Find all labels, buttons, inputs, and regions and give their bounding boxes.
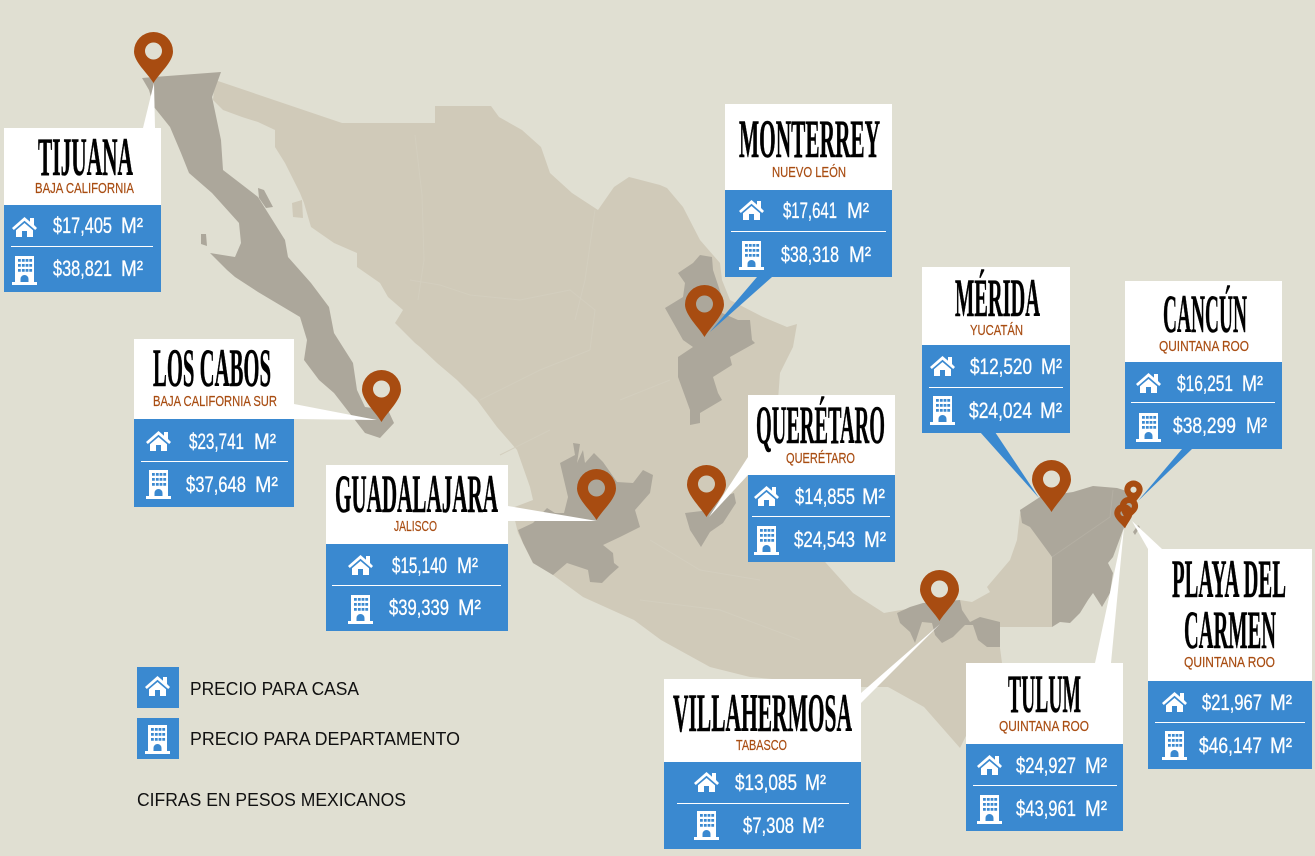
apartment price: $38,318 bbox=[781, 242, 839, 267]
map: Jalisco bbox=[518, 443, 653, 583]
apartment unit: M² bbox=[121, 256, 143, 281]
apartment price: $43,961 bbox=[1016, 796, 1076, 821]
note: currency: CIFRAS EN PESOS MEXICANOS bbox=[137, 790, 406, 810]
panel: Cancún bbox=[1125, 281, 1282, 501]
map: Gulf of California islands bbox=[201, 188, 273, 246]
map: Querétaro bbox=[685, 493, 736, 547]
icon: house bbox=[1136, 373, 1161, 393]
map: Sonora island bbox=[292, 200, 303, 218]
pointer bbox=[861, 624, 940, 703]
legend: building swatch bbox=[137, 718, 179, 759]
pin: Cancún bbox=[1124, 480, 1143, 505]
header bbox=[1125, 281, 1282, 362]
icon: house bbox=[146, 431, 171, 451]
map: Tabasco bbox=[897, 600, 1000, 647]
header bbox=[966, 663, 1123, 744]
pointer bbox=[980, 432, 1039, 498]
apartment price: $39,339 bbox=[389, 595, 449, 620]
legend: house swatch bbox=[137, 667, 179, 708]
text: QUERÉTARO bbox=[756, 395, 885, 455]
apartment unit: M² bbox=[1085, 796, 1107, 821]
apartment price: $38,821 bbox=[53, 256, 112, 281]
apartment unit: M² bbox=[864, 527, 886, 552]
pin: Tulum bbox=[1113, 503, 1134, 529]
pin: Tijuana bbox=[134, 32, 173, 83]
state name: BAJA CALIFORNIA SUR bbox=[153, 393, 277, 410]
header bbox=[134, 339, 294, 419]
apartment unit: M² bbox=[1270, 733, 1292, 758]
icon: building bbox=[694, 811, 719, 840]
legend: house label: PRECIO PARA CASA bbox=[190, 679, 359, 699]
prices block bbox=[1148, 681, 1312, 769]
house unit: M² bbox=[847, 198, 869, 223]
header bbox=[922, 267, 1070, 345]
header bbox=[725, 104, 892, 190]
prices block bbox=[134, 419, 294, 507]
prices block bbox=[4, 205, 161, 292]
panel: Guadalajara: GUADALAJARA bbox=[335, 464, 498, 524]
panel: Tulum: TULUM bbox=[1008, 664, 1081, 724]
panel: Mérida: MÉRIDA bbox=[955, 268, 1040, 328]
icon: house bbox=[739, 200, 764, 220]
apartment unit: M² bbox=[1246, 413, 1267, 438]
apartment price: $38,299 bbox=[1173, 413, 1236, 438]
icon: house bbox=[754, 486, 779, 506]
panel: Mérida bbox=[922, 267, 1070, 498]
panel: Querétaro bbox=[709, 395, 895, 562]
state name: NUEVO LEÓN bbox=[772, 164, 846, 181]
house unit: M² bbox=[1242, 371, 1263, 396]
apartment price: $37,648 bbox=[186, 472, 246, 497]
house price: $21,967 bbox=[1202, 690, 1262, 715]
header bbox=[1148, 549, 1312, 681]
state name: QUINTANA ROO bbox=[1159, 338, 1249, 355]
text: MONTERREY bbox=[739, 109, 880, 169]
house price: $17,641 bbox=[783, 198, 837, 223]
house price: $23,741 bbox=[189, 429, 244, 454]
header bbox=[326, 465, 508, 544]
apartment unit: M² bbox=[255, 472, 278, 497]
icon: house bbox=[12, 217, 37, 237]
apartment unit: M² bbox=[802, 813, 824, 838]
apartment price: $7,308 bbox=[743, 813, 794, 838]
prices block bbox=[326, 544, 508, 631]
pin: Los Cabos bbox=[362, 370, 401, 422]
panel: Guadalajara bbox=[326, 464, 597, 631]
map: mainland states bbox=[213, 80, 1052, 748]
panel: Los Cabos: LOS CABOS bbox=[153, 338, 271, 398]
prices block bbox=[748, 475, 895, 562]
pin: Querétaro bbox=[687, 465, 726, 517]
apartment price: $46,147 bbox=[1199, 733, 1262, 758]
pin: Villahermosa bbox=[920, 570, 959, 621]
icon: house bbox=[348, 555, 373, 575]
pointer bbox=[1138, 449, 1192, 501]
pointer bbox=[709, 457, 748, 517]
house price: $17,405 bbox=[53, 213, 112, 238]
legend: building label: PRECIO PARA DEPARTAMENTO bbox=[190, 729, 460, 749]
pointer bbox=[710, 277, 772, 332]
panel: Tijuana: TIJUANA bbox=[38, 127, 133, 187]
icon: building bbox=[739, 241, 764, 270]
icon: building bbox=[754, 526, 779, 555]
icon: house bbox=[1162, 692, 1187, 712]
icon: house bbox=[930, 356, 955, 376]
icon: building bbox=[1136, 413, 1161, 442]
icon: house bbox=[977, 755, 1002, 775]
state name: YUCATÁN bbox=[970, 322, 1023, 339]
map: Nuevo León bbox=[665, 255, 755, 425]
header bbox=[4, 128, 161, 205]
house unit: M² bbox=[805, 770, 826, 795]
pin: Guadalajara bbox=[577, 469, 616, 520]
pin: Mérida bbox=[1032, 460, 1071, 512]
pin: Playa del Carmen bbox=[1117, 495, 1140, 523]
map: Baja California peninsula bbox=[142, 72, 394, 438]
apartment price: $24,024 bbox=[969, 398, 1032, 423]
icon: building bbox=[977, 795, 1002, 824]
pointer bbox=[294, 404, 377, 420]
house price: $13,085 bbox=[735, 770, 797, 795]
apartment unit: M² bbox=[1040, 398, 1062, 423]
icon: building bbox=[1162, 731, 1187, 760]
prices block bbox=[664, 762, 861, 849]
prices block bbox=[922, 345, 1070, 433]
icon: building bbox=[12, 256, 37, 285]
icon: building bbox=[348, 595, 373, 624]
panel: Tulum bbox=[966, 527, 1124, 831]
prices block bbox=[725, 190, 892, 277]
house price: $12,520 bbox=[970, 354, 1032, 379]
state name: TABASCO bbox=[736, 737, 787, 754]
house unit: M² bbox=[862, 484, 885, 509]
panel: Villahermosa bbox=[664, 624, 940, 849]
prices block bbox=[1125, 362, 1282, 449]
state name: QUINTANA ROO bbox=[999, 718, 1089, 735]
house unit: M² bbox=[457, 553, 478, 578]
apartment unit: M² bbox=[458, 595, 481, 620]
panel: Villahermosa: VILLAHERMOSA bbox=[673, 683, 852, 743]
pointer bbox=[1095, 527, 1124, 663]
state name: JALISCO bbox=[394, 518, 437, 535]
state name: QUINTANA ROO bbox=[1184, 654, 1275, 671]
header bbox=[664, 679, 861, 762]
icon: building bbox=[145, 725, 170, 754]
house price: $24,927 bbox=[1016, 753, 1076, 778]
apartment unit: M² bbox=[849, 242, 871, 267]
icon: house bbox=[145, 676, 170, 696]
pins bbox=[134, 32, 1143, 621]
header bbox=[748, 395, 895, 475]
state name: QUERÉTARO bbox=[786, 450, 855, 467]
map: faint state borders bbox=[410, 135, 800, 640]
house unit: M² bbox=[121, 213, 143, 238]
state name: BAJA CALIFORNIA bbox=[35, 180, 134, 197]
map: Cozumel island bbox=[1133, 525, 1140, 535]
icon: house bbox=[694, 772, 719, 792]
panel: Playa del Carmen bbox=[1132, 521, 1312, 769]
legend bbox=[137, 667, 460, 810]
panel: Los Cabos bbox=[134, 338, 377, 507]
map: Yucatán peninsula bbox=[1020, 486, 1133, 627]
pointer bbox=[143, 83, 155, 128]
panel: Monterrey bbox=[710, 104, 892, 332]
house unit: M² bbox=[1085, 753, 1107, 778]
pointer bbox=[508, 506, 597, 521]
map: Yucatán state border bbox=[1052, 490, 1113, 557]
panel: Tijuana bbox=[4, 83, 161, 292]
house unit: M² bbox=[254, 429, 276, 454]
pin: Monterrey bbox=[685, 285, 724, 337]
house unit: M² bbox=[1270, 690, 1292, 715]
house price: $15,140 bbox=[392, 553, 447, 578]
icon: building bbox=[930, 396, 955, 425]
house price: $16,251 bbox=[1177, 371, 1233, 396]
house price: $14,855 bbox=[795, 484, 855, 509]
map of Mexico bbox=[142, 72, 1140, 748]
apartment price: $24,543 bbox=[794, 527, 855, 552]
prices block bbox=[966, 744, 1123, 831]
house unit: M² bbox=[1041, 354, 1062, 379]
pointer bbox=[1132, 521, 1162, 549]
icon: building bbox=[146, 470, 171, 499]
